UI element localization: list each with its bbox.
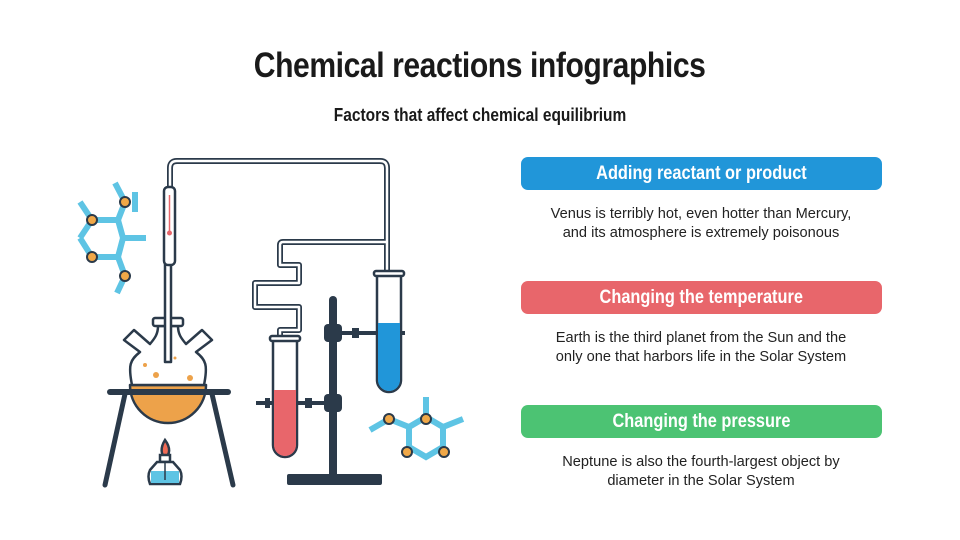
text: pressure — [562, 454, 840, 489]
subtitle: Factors that affect chemical equilibrium — [334, 105, 626, 125]
icon: molecule right — [370, 397, 463, 457]
text: adding reactant: and its atmosphere is extremely poisonous — [563, 225, 839, 241]
test tube blue — [374, 271, 404, 392]
pill: pressure — [521, 405, 882, 438]
pill: pressure: Changing the pressure — [613, 411, 790, 432]
pill: adding reactant: Adding reactant or product — [596, 163, 807, 184]
text: adding reactant: Venus is terribly hot, even hotter than Mercury, — [551, 206, 851, 222]
text: adding reactant — [550, 206, 851, 241]
tripod — [105, 394, 233, 485]
text: temperature — [556, 330, 846, 365]
title: Chemical reactions infographics — [254, 46, 706, 85]
stand — [256, 296, 405, 485]
flask — [124, 187, 212, 423]
icon: molecule left — [80, 183, 146, 293]
text: temperature: only one that harbors life in the Solar System — [556, 349, 846, 365]
test tube red — [270, 336, 300, 457]
text: pressure: diameter in the Solar System — [607, 473, 795, 489]
panel: adding reactant — [521, 157, 882, 489]
pill: temperature — [521, 281, 882, 314]
pill: temperature: Changing the temperature — [600, 287, 803, 308]
burner — [148, 440, 182, 484]
pill: adding reactant — [521, 157, 882, 190]
pipes — [170, 161, 387, 338]
text: pressure: Neptune is also the fourth-largest object by — [562, 454, 840, 470]
text: temperature: Earth is the third planet from the Sun and the — [556, 330, 846, 346]
